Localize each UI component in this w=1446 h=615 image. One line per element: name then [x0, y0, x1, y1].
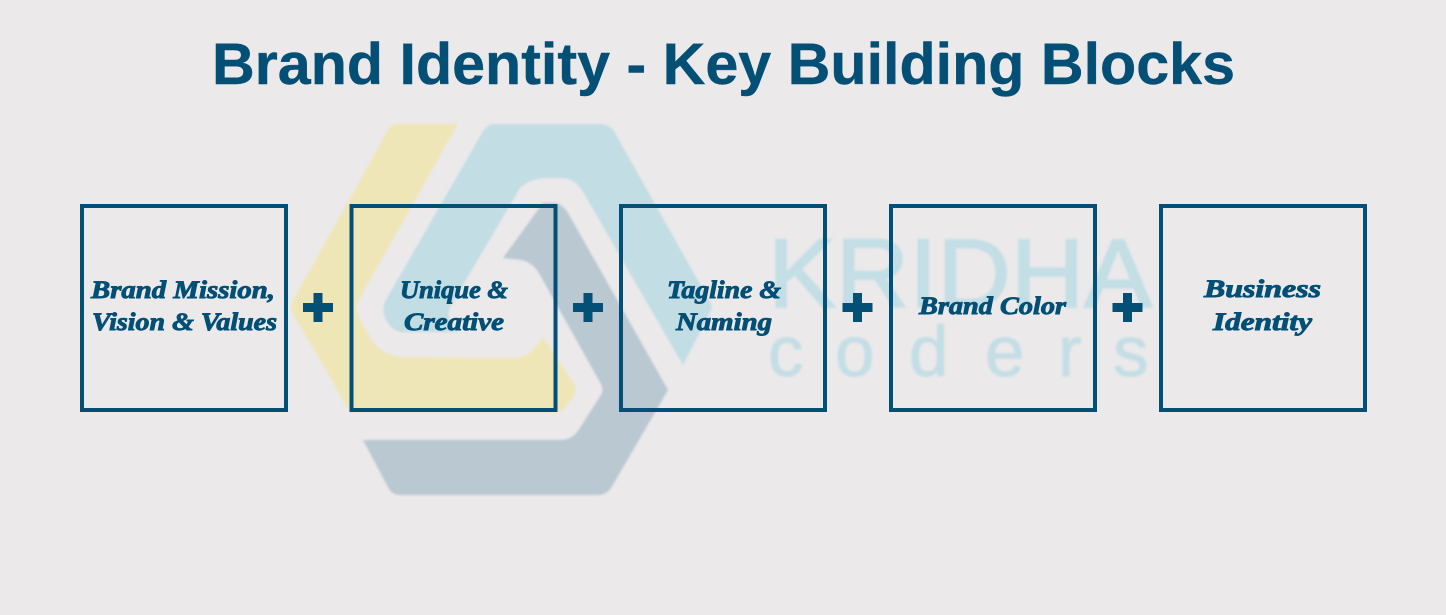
block: Unique & Creative: Unique & — [400, 277, 509, 304]
watermark wordmark KRIDHA coders: KRIDHA — [768, 219, 1152, 328]
block: Tagline & Naming: Tagline & — [667, 277, 782, 304]
title: Brand Identity - Key Building Blocks — [212, 32, 1235, 97]
watermark wordmark KRIDHA coders: coders — [768, 313, 1148, 392]
watermark logo hexagon — [291, 124, 712, 495]
block: Business Identity — [1161, 206, 1365, 410]
block: Brand Mission, Vision & Values — [82, 206, 286, 410]
block: Brand Mission, Vision & Values: Vision & Values — [92, 309, 277, 336]
plus icon 3 — [842, 293, 872, 322]
block: Unique & Creative: Creative — [404, 309, 504, 336]
block: Tagline & Naming — [621, 206, 825, 410]
block: Brand Color: Brand Color — [918, 293, 1066, 320]
plus icon 1 — [303, 293, 333, 322]
block: Tagline & Naming: Naming — [675, 309, 772, 336]
block: Business Identity: Identity — [1212, 309, 1313, 336]
block: Business Identity: Business — [1203, 276, 1321, 303]
block: Brand Mission, Vision & Values: Brand Mission, — [90, 277, 275, 304]
plus icon 2 — [573, 293, 603, 322]
block: Brand Color — [891, 206, 1095, 410]
block: Unique & Creative — [352, 206, 556, 410]
watermark wordmark KRIDHA coders — [768, 219, 1152, 392]
plus icon 4 — [1112, 293, 1142, 322]
